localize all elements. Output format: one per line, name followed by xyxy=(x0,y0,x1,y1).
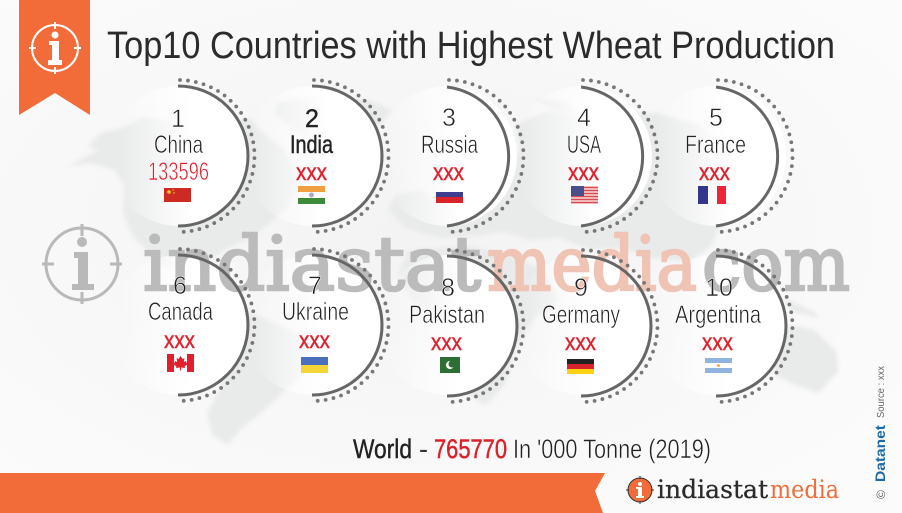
panel: USA: USA xyxy=(567,131,601,159)
panel: Pakistan: xxx xyxy=(431,329,462,355)
logo: indiastat xyxy=(657,475,768,504)
world total: In '000 Tonne (2019) xyxy=(513,434,711,464)
panel: Germany: 9 xyxy=(574,274,588,302)
panel: Russia xyxy=(421,80,524,232)
panel: France: 5 xyxy=(709,104,723,132)
watermark text: com xyxy=(702,220,850,308)
source credit: Datanet xyxy=(872,425,888,482)
logo xyxy=(626,475,839,504)
watermark icon xyxy=(42,224,122,304)
panel: Pakistan: 8 xyxy=(441,274,455,302)
panel: Ukraine xyxy=(282,249,389,401)
world total xyxy=(353,434,711,464)
panel: India: India xyxy=(290,131,333,159)
icon: info xyxy=(29,22,81,74)
panel: Canada: xxx xyxy=(164,327,195,353)
panel: France: France xyxy=(685,131,746,159)
panel: Argentina: xxx xyxy=(702,329,733,355)
panel: Argentina: Argentina xyxy=(675,301,761,329)
title: Top10 Countries with Highest Wheat Production xyxy=(107,25,835,67)
source credit: © xyxy=(874,490,888,499)
panel: Pakistan xyxy=(409,250,523,402)
panel: USA: xxx xyxy=(568,159,599,185)
panel: India: 2 xyxy=(305,105,319,133)
panel: India: xxx xyxy=(296,159,327,185)
panel: India xyxy=(290,80,389,232)
panel: Pakistan: Pakistan xyxy=(409,301,485,329)
panel: China: China xyxy=(154,131,203,159)
panel: Canada: Canada xyxy=(148,298,213,326)
watermark text xyxy=(143,220,850,308)
panel: China: 133596 xyxy=(148,158,209,186)
panel: China: 1 xyxy=(171,105,185,133)
ribbon xyxy=(19,0,90,115)
panel: Argentina xyxy=(675,250,792,402)
white circles xyxy=(108,86,786,395)
panel: Germany: Germany xyxy=(542,301,620,329)
panel: Ukraine: Ukraine xyxy=(282,298,349,326)
panel: France xyxy=(685,80,793,232)
panel: Russia: Russia xyxy=(421,131,478,159)
panel: USA: 4 xyxy=(577,104,591,132)
watermark text: indiastat xyxy=(143,220,481,308)
panel: USA xyxy=(567,80,658,232)
world total: World xyxy=(353,434,412,464)
source credit: Source : xxx xyxy=(875,365,887,418)
panel: Russia: xxx xyxy=(433,159,464,185)
logo: media xyxy=(770,475,839,504)
panel: Germany xyxy=(542,250,657,402)
world total: - xyxy=(419,434,428,464)
panel: Argentina: 10 xyxy=(705,274,733,302)
panel: China xyxy=(148,80,255,232)
panel: Ukraine: 7 xyxy=(308,272,322,300)
bottom bar xyxy=(0,473,605,513)
panel: Russia: 3 xyxy=(442,104,456,132)
panel: Canada xyxy=(148,249,255,401)
source credit xyxy=(872,365,888,499)
panel: Ukraine: xxx xyxy=(299,327,330,353)
panel: Canada: 6 xyxy=(173,272,187,300)
panel: Germany: xxx xyxy=(565,329,596,355)
watermark xyxy=(42,220,850,308)
world total: 765770 xyxy=(434,434,507,464)
watermark text: media xyxy=(487,220,697,308)
panel: France: xxx xyxy=(699,159,730,185)
world map background xyxy=(67,95,838,445)
